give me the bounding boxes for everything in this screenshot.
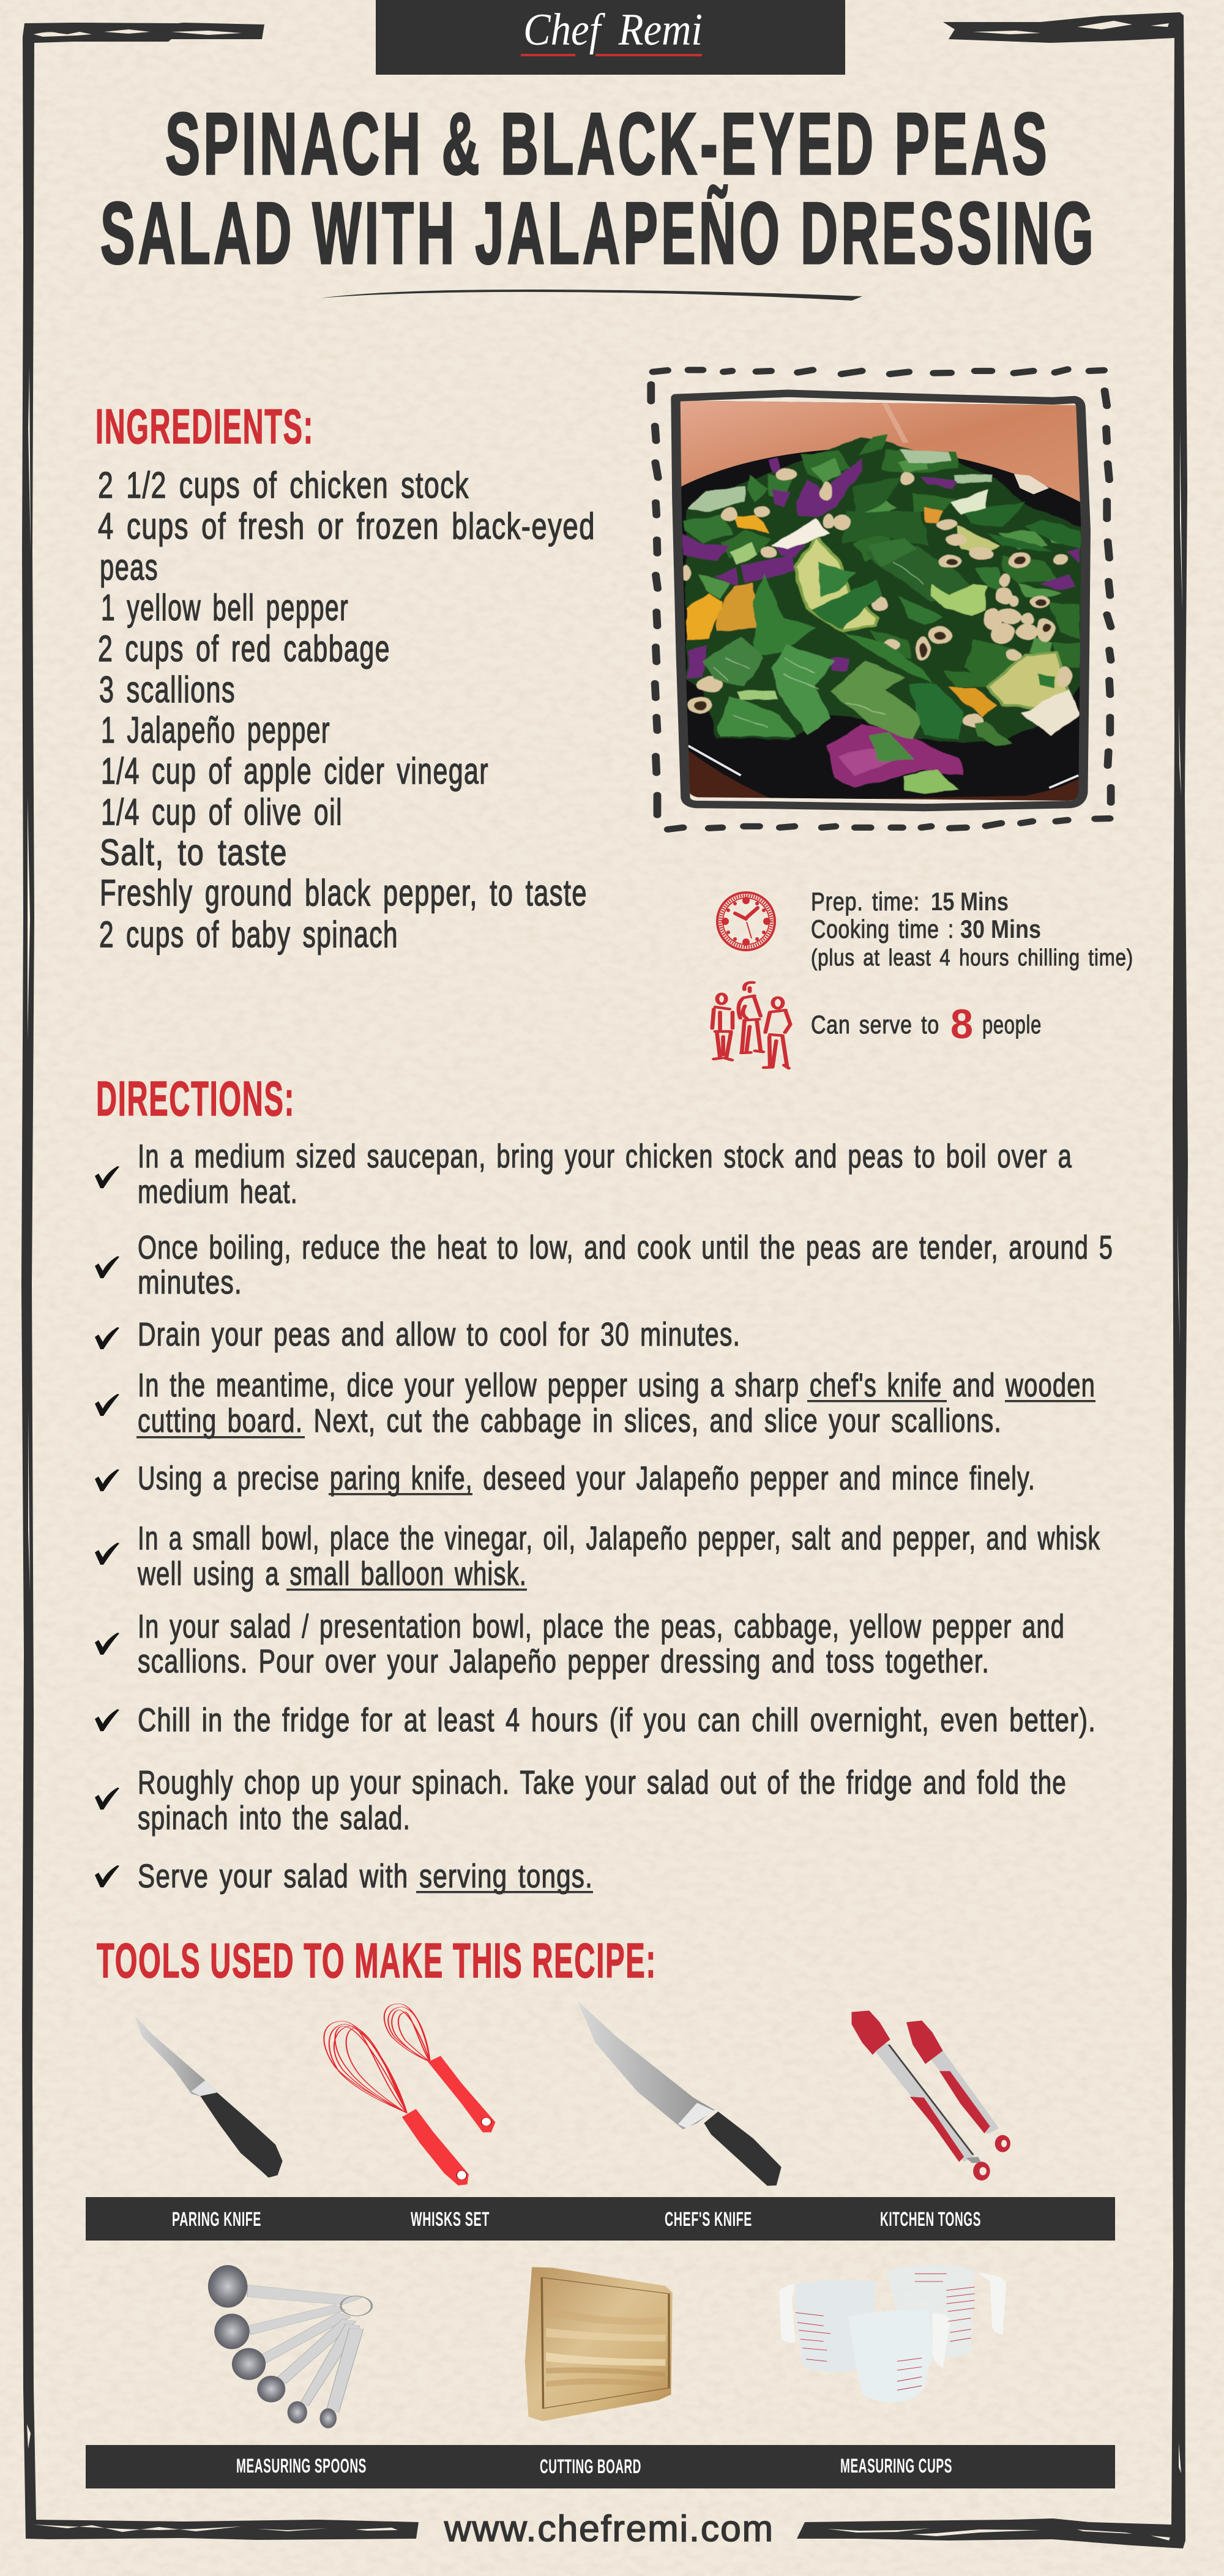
step 1	[95, 1138, 1072, 1210]
ingredients list: Salt, to taste	[100, 832, 288, 873]
label bar 1: WHISKS SET	[411, 2208, 490, 2230]
step 2	[95, 1229, 1113, 1301]
step 4	[95, 1367, 1095, 1439]
prep and cooking time: 15 Mins	[931, 887, 1009, 916]
servings text: 8	[950, 1001, 973, 1047]
step 10: Serve your salad with serving tongs.	[138, 1858, 593, 1895]
ingredients list: 1 yellow bell pepper	[101, 587, 349, 628]
step 1: medium heat.	[138, 1174, 298, 1210]
dashed frame	[651, 369, 1111, 829]
prep and cooking time: Prep. time:	[811, 887, 920, 916]
tools row 1 images	[135, 2001, 1010, 2186]
ingredients list: 2 1/2 cups of chicken stock	[98, 465, 469, 506]
photo frame	[676, 394, 1086, 807]
icon: measuring spoons	[208, 2265, 371, 2428]
directions list	[95, 1138, 1113, 1895]
label bar 1: KITCHEN TONGS	[880, 2208, 981, 2230]
icon: whisks set	[324, 2004, 495, 2185]
icon: kitchen tongs	[852, 2010, 1010, 2181]
prep and cooking time: Cooking time :	[811, 915, 954, 943]
step 6	[95, 1520, 1100, 1592]
icon: clock	[717, 893, 775, 950]
heading: tools: TOOLS USED TO MAKE THIS RECIPE:	[97, 1933, 657, 1988]
website footer: www.chefremi.com	[444, 2508, 774, 2549]
step 3: Drain your peas and allow to cool for 30 minutes.	[138, 1316, 741, 1353]
prep and cooking time: (plus at least 4 hours chilling time)	[811, 945, 1133, 971]
step 9	[95, 1764, 1067, 1837]
ingredients list: 2 cups of baby spinach	[99, 914, 398, 955]
label bar 1	[86, 2197, 1115, 2241]
step 2: minutes.	[138, 1264, 242, 1301]
step 7: scallions. Pour over your Jalapeño pepper dressing and toss together.	[138, 1643, 990, 1680]
prep and cooking time	[811, 887, 1133, 971]
step 6: well using a small balloon whisk.	[137, 1556, 527, 1592]
logo banner	[376, 0, 845, 75]
label bar 1: CHEF'S KNIFE	[665, 2208, 752, 2230]
icon: paring knife	[135, 2016, 283, 2177]
heading: ingredients: INGREDIENTS:	[95, 399, 314, 454]
label bar 2: MEASURING SPOONS	[236, 2455, 367, 2477]
step 7	[95, 1608, 1065, 1680]
servings text: Can serve to	[811, 1010, 939, 1039]
ingredients list	[98, 465, 595, 955]
ingredients list: Freshly ground black pepper, to taste	[100, 872, 588, 913]
title swoosh	[320, 290, 862, 301]
icon: measuring cups	[779, 2265, 1006, 2402]
prep and cooking time: 30 Mins	[960, 915, 1041, 943]
label bar 2	[86, 2445, 1115, 2488]
icon: three people	[712, 983, 790, 1068]
servings text: people	[982, 1010, 1042, 1039]
title	[100, 95, 1097, 282]
salad photograph	[674, 396, 1088, 805]
icon: cutting board	[525, 2267, 673, 2421]
ingredients list: 4 cups of fresh or frozen black-eyed	[98, 506, 595, 547]
servings text	[811, 1001, 1042, 1047]
ingredients list: peas	[100, 547, 159, 588]
tools row 2 images	[208, 2265, 1006, 2428]
salad ingredients	[682, 435, 1083, 794]
ingredients list: 1 Jalapeño pepper	[101, 710, 330, 751]
label bar 2: CUTTING BOARD	[540, 2455, 641, 2477]
logo banner: Chef Remi	[523, 5, 703, 55]
ingredients list: 2 cups of red cabbage	[98, 628, 390, 669]
ingredients list: 3 scallions	[99, 669, 236, 710]
step 9: spinach into the salad.	[138, 1800, 411, 1837]
label bar 1: PARING KNIFE	[172, 2208, 261, 2230]
ingredients list: 1/4 cup of apple cider vinegar	[101, 751, 489, 792]
label bar 2: MEASURING CUPS	[840, 2455, 952, 2477]
heading: directions: DIRECTIONS:	[96, 1071, 295, 1126]
icon: chef's knife	[578, 2001, 782, 2186]
ingredients list: 1/4 cup of olive oil	[101, 792, 343, 833]
photo panel: salad	[651, 369, 1111, 829]
logo underline	[521, 54, 702, 56]
